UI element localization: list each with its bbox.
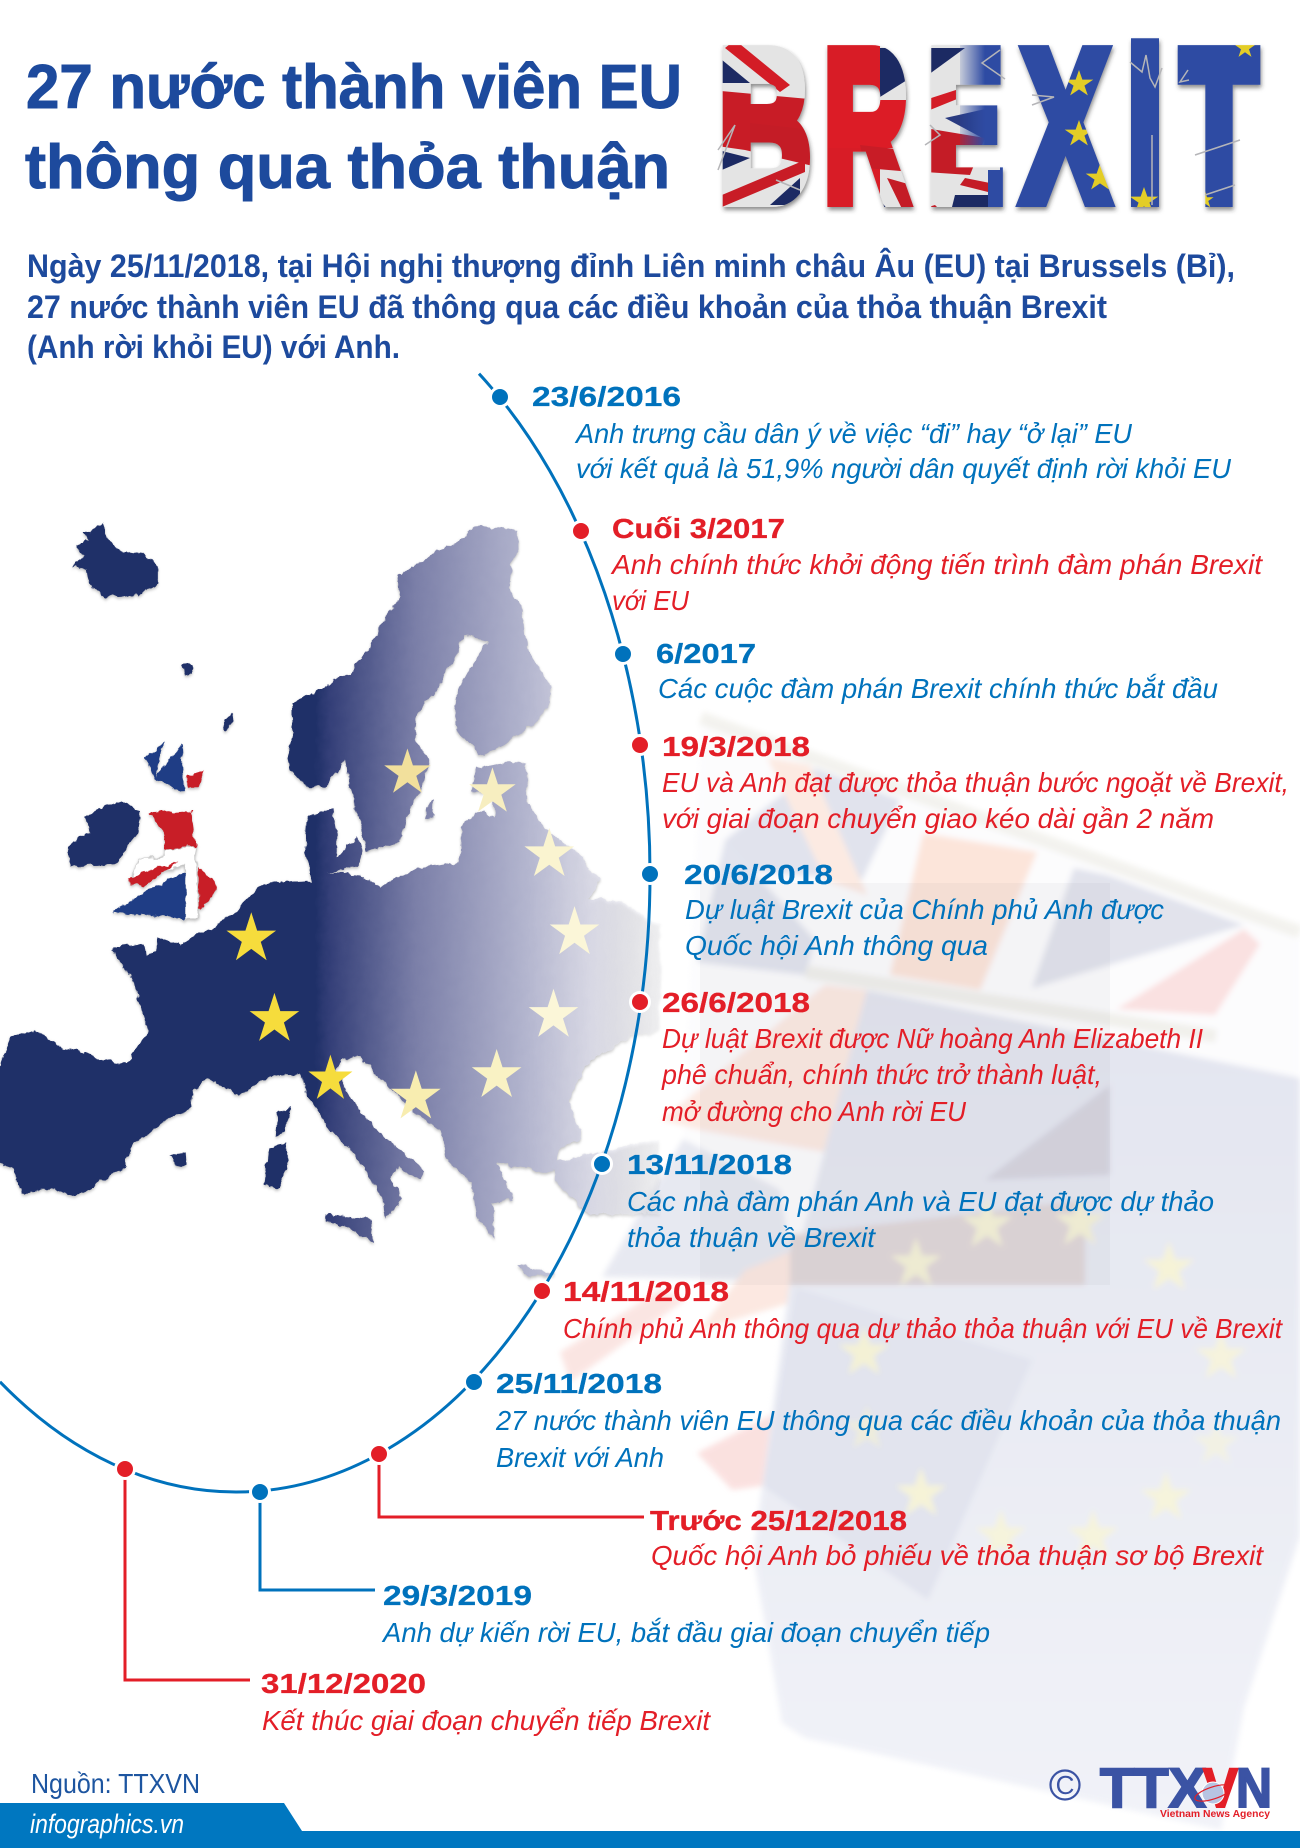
event: 25/11/2018 [464, 1368, 1281, 1473]
description [661, 1023, 1203, 1127]
description: Dự luật Brexit được Nữ hoàng Anh Elizabeth II [662, 1023, 1203, 1054]
dot [370, 1444, 388, 1464]
map: EU stars [226, 748, 599, 1118]
description [662, 767, 1289, 834]
website: infographics.vn [30, 1809, 184, 1839]
upper flag: Union Jack [560, 720, 1300, 1490]
TTXVN logo: TTX [1100, 1756, 1206, 1819]
date: 14/11/2018 [563, 1276, 729, 1307]
description: Dự luật Brexit của Chính phủ Anh được [685, 894, 1164, 925]
map: Ireland [67, 801, 141, 867]
map of Europe [0, 523, 660, 1278]
TTXVN logo [1100, 1756, 1272, 1820]
dot [630, 992, 650, 1012]
dot [630, 736, 650, 754]
source: Nguồn: TTXVN [31, 1768, 200, 1799]
description: mở đường cho Anh rời EU [662, 1096, 967, 1127]
lower flag: EU [753, 990, 1300, 1830]
event: 26/6/2018 [630, 987, 1203, 1127]
date: 23/6/2016 [532, 381, 681, 412]
connector [379, 1454, 644, 1517]
map: Turkey fade [551, 1138, 660, 1214]
date: 20/6/2018 [684, 859, 833, 890]
TTXVN logo: N [1236, 1756, 1272, 1819]
tagline: Vietnam News Agency [1160, 1809, 1270, 1820]
connector [260, 1492, 375, 1590]
event: 20/6/2018 [640, 859, 1164, 961]
BREXIT logotype: E [928, 7, 1003, 244]
description: Quốc hội Anh bỏ phiếu về thỏa thuận sơ bộ Brexit [651, 1540, 1264, 1571]
map: Denmark and islands [305, 809, 362, 875]
description: Brexit với Anh [496, 1442, 664, 1473]
title: thông qua thỏa thuận [25, 133, 670, 202]
dot [116, 1460, 134, 1478]
event: 6/2017 [614, 638, 1218, 704]
dot [640, 864, 660, 884]
upper flag pole [701, 718, 1300, 932]
title [25, 53, 682, 202]
connector [125, 1469, 250, 1680]
map: Iceland [72, 523, 158, 597]
description: Anh chính thức khởi động tiến trình đàm phán Brexit [610, 549, 1263, 580]
map: Scandinavia [287, 526, 551, 852]
description [610, 549, 1263, 616]
description: Quốc hội Anh thông qua [685, 930, 988, 961]
map: Sardinia [263, 1143, 288, 1189]
event: 29/3/2019 [250, 1482, 990, 1648]
BREXIT logotype: B [719, 7, 811, 244]
dot [614, 644, 632, 664]
map: United Kingdom flag [112, 742, 217, 918]
event: 19/3/2018 [630, 731, 1289, 834]
event: 23/6/2016 [490, 381, 1232, 484]
description: phê chuẩn, chính thức trở thành luật, [661, 1059, 1102, 1090]
description [627, 1186, 1214, 1253]
map: Sicily [326, 1214, 372, 1242]
event: 14/11/2018 [532, 1276, 1283, 1344]
dot [490, 388, 510, 406]
date: 6/2017 [656, 638, 756, 669]
map: Balearic islands [169, 1153, 186, 1166]
intro paragraph: (Anh rời khỏi EU) với Anh. [27, 329, 400, 365]
date: 25/11/2018 [496, 1368, 662, 1399]
background: blurred flags [560, 718, 1300, 1830]
description: Kết thúc giai đoạn chuyển tiếp Brexit [262, 1705, 711, 1736]
date: 19/3/2018 [662, 731, 810, 762]
date: 29/3/2019 [383, 1580, 532, 1611]
footer bar [0, 1803, 1300, 1848]
date: Trước 25/12/2018 [650, 1505, 907, 1536]
map: Gotland [425, 801, 434, 820]
TTXVN logo: V [1203, 1756, 1238, 1819]
map: Corsica [276, 1107, 290, 1135]
description: thỏa thuận về Brexit [627, 1222, 876, 1253]
intro paragraph [27, 248, 1235, 365]
lower flag pole [806, 972, 1216, 1036]
dot [464, 1372, 484, 1392]
description: Các nhà đàm phán Anh và EU đạt được dự thảo [627, 1186, 1214, 1217]
BREXIT logotype: R [824, 7, 908, 244]
dot [572, 522, 590, 540]
copyright symbol: C [1056, 1770, 1074, 1800]
map: Crete [516, 1265, 556, 1278]
date: 13/11/2018 [627, 1149, 792, 1180]
description: với kết quả là 51,9% người dân quyết định rời khỏi EU [576, 453, 1232, 484]
BREXIT logotype: X [1023, 7, 1108, 244]
BREXIT logotype [718, 0, 1257, 247]
date: 31/12/2020 [261, 1668, 426, 1699]
description [685, 894, 1164, 961]
intro paragraph: Ngày 25/11/2018, tại Hội nghị thượng đỉnh Liên minh châu Âu (EU) tại Brussels (Bỉ), [27, 248, 1235, 284]
description: Anh trưng cầu dân ý về việc “đi” hay “ở lại” EU [574, 418, 1133, 449]
orbit [1193, 1781, 1233, 1805]
event: Cuối 3/2017 [572, 513, 1263, 616]
dot [592, 1154, 612, 1174]
dot [532, 1282, 552, 1300]
map: Faroe and Shetland [183, 664, 234, 731]
description: Anh dự kiến rời EU, bắt đầu giai đoạn chuyển tiếp [381, 1617, 990, 1648]
date: 26/6/2018 [662, 987, 810, 1018]
intro paragraph: 27 nước thành viên EU đã thông qua các điều khoản của thỏa thuận Brexit [27, 289, 1107, 325]
map: land masses [0, 523, 660, 1278]
description [574, 418, 1232, 484]
event: 13/11/2018 [592, 1149, 1214, 1253]
title: 27 nước thành viên EU [26, 53, 682, 122]
date: Cuối 3/2017 [612, 513, 785, 544]
dot [250, 1482, 270, 1502]
description: Các cuộc đàm phán Brexit chính thức bắt đầu [658, 673, 1218, 704]
copyright symbol [1050, 1770, 1080, 1800]
description [495, 1405, 1281, 1473]
globe [1202, 1782, 1224, 1804]
BREXIT logotype: I [1127, 0, 1163, 247]
description: với EU [612, 585, 690, 616]
timeline arc [0, 374, 650, 1492]
event: 31/12/2020 [116, 1460, 711, 1736]
description: với giai đoạn chuyển giao kéo dài gần 2 năm [662, 803, 1214, 834]
map: continental Europe [0, 763, 660, 1240]
description: 27 nước thành viên EU thông qua các điều khoản của thỏa thuận [495, 1405, 1281, 1436]
event: Trước 25/12/2018 [370, 1444, 1264, 1571]
